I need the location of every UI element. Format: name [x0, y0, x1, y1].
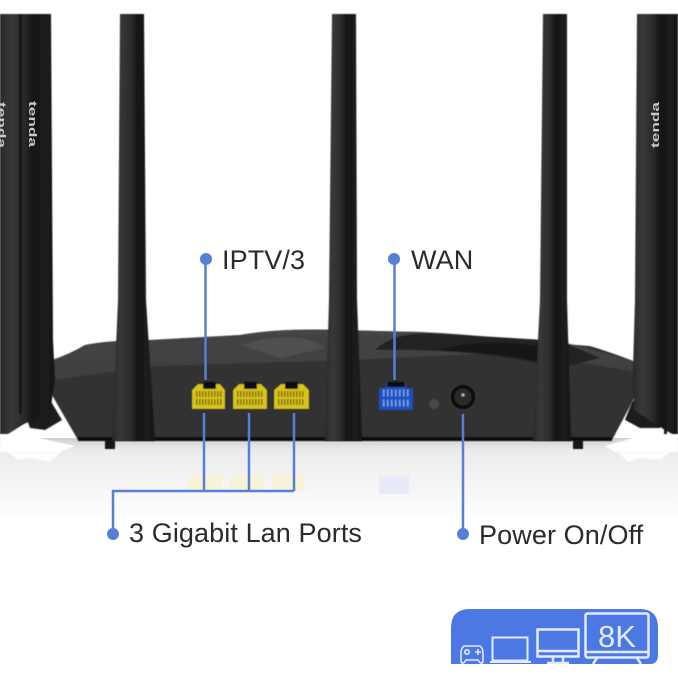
callout: Power On/Off — [457, 414, 644, 550]
antenna logo: right: tenda — [650, 101, 662, 148]
LAN port 1 — [192, 382, 225, 409]
icon: laptop — [490, 638, 531, 662]
antenna logo: left 2: tenda — [26, 101, 38, 148]
antenna mounts — [20, 386, 668, 430]
antenna: far left pair — [0, 14, 55, 434]
antenna: far right pair — [633, 14, 678, 434]
icon: game controller — [461, 646, 483, 663]
WAN port — [379, 382, 413, 410]
LAN port 3 — [274, 382, 309, 409]
reset button — [429, 399, 439, 409]
callout: Power On/Off: Power On/Off — [479, 520, 644, 550]
callout: WAN: WAN — [411, 245, 473, 275]
icon: TV 8K — [586, 614, 648, 664]
callout: 3 Gigabit Lan Ports — [107, 413, 362, 548]
antenna: center — [325, 14, 362, 441]
floor reflection — [0, 436, 678, 523]
badge: device icons — [451, 609, 658, 664]
callout: WAN — [388, 245, 473, 380]
callout: IPTV/3: IPTV/3 — [222, 245, 305, 275]
callout: IPTV/3 — [200, 245, 305, 380]
router body — [52, 330, 636, 449]
antenna: right — [533, 14, 571, 441]
icon: desktop monitor — [538, 630, 578, 663]
callout: 3 Gigabit Lan Ports: 3 Gigabit Lan Ports — [129, 518, 362, 548]
icon: TV 8K: 8K — [598, 619, 636, 654]
LAN port 2 — [233, 382, 267, 409]
antennas — [0, 14, 678, 441]
power jack — [450, 384, 476, 410]
antenna: left — [112, 14, 155, 441]
